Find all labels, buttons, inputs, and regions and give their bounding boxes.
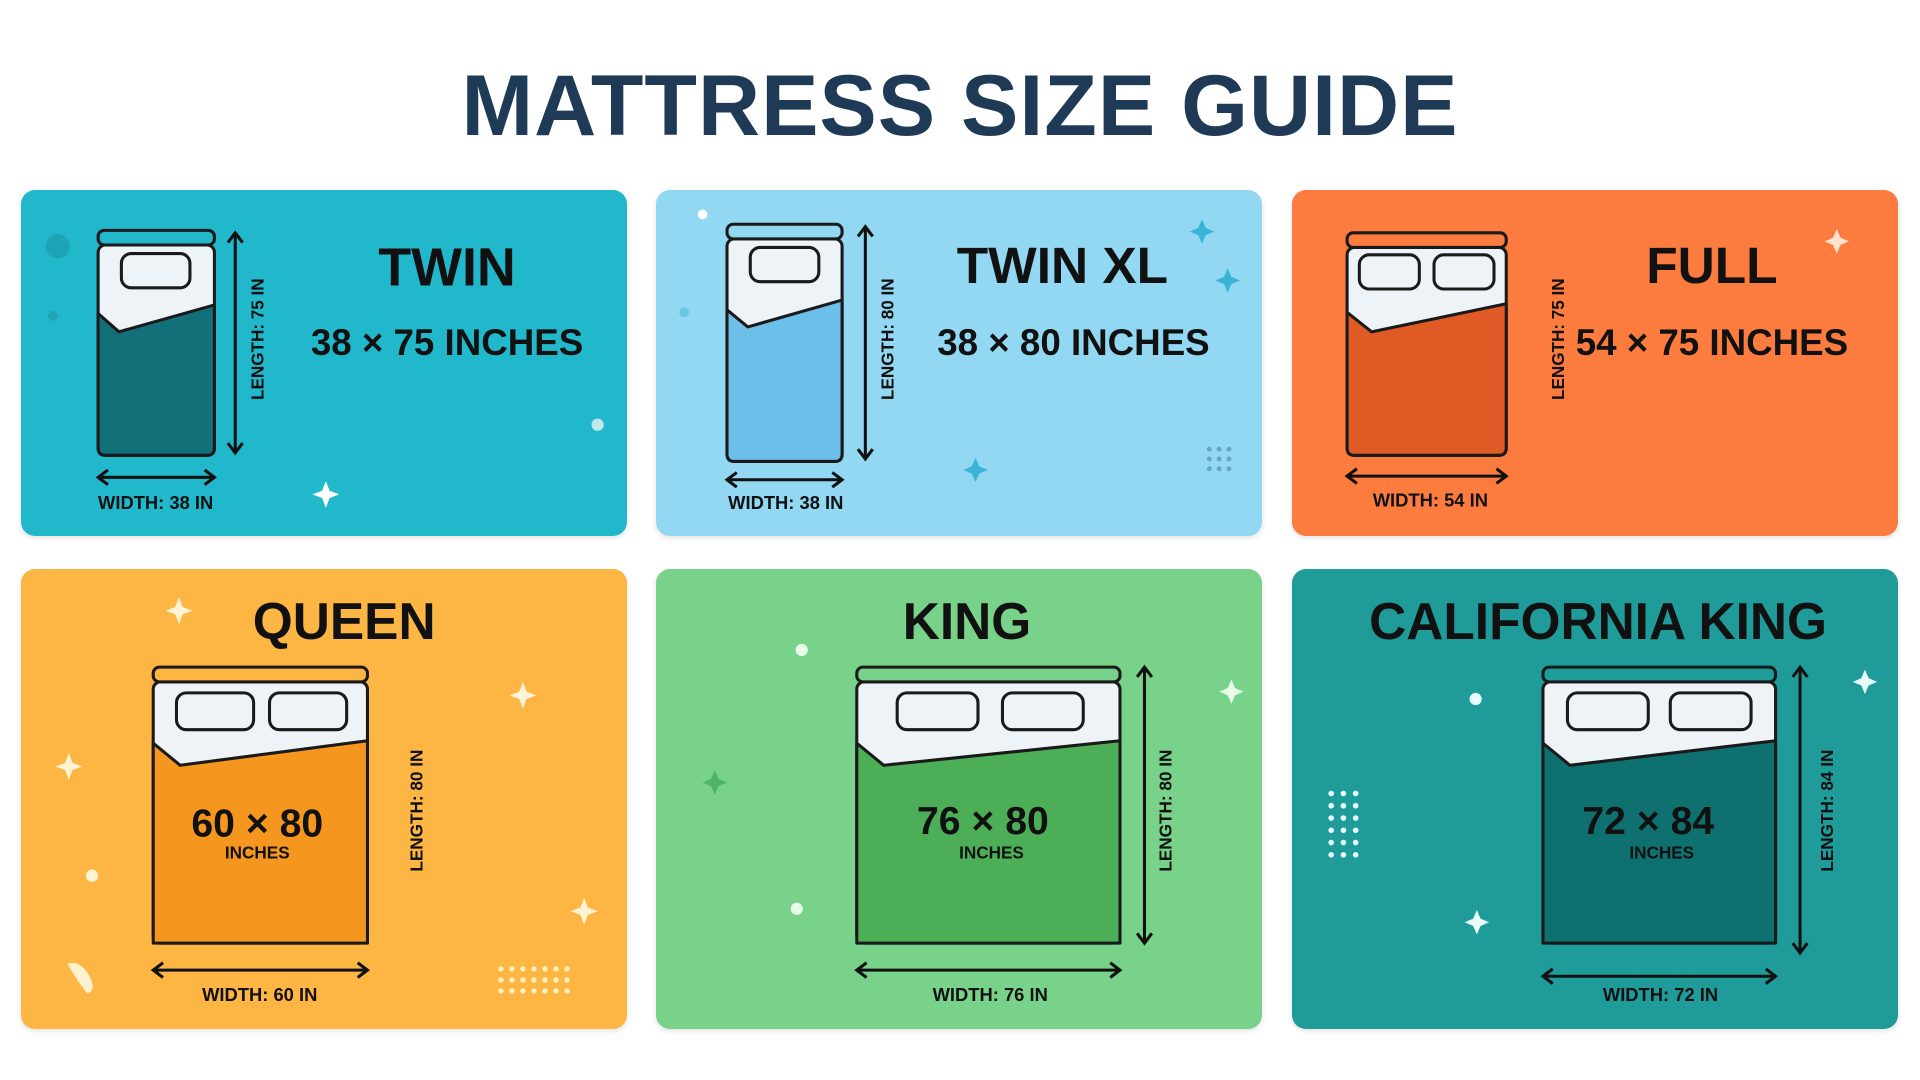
arrow: california king width <box>1543 969 1776 984</box>
label: king width: WIDTH: 76 IN <box>933 984 1048 1005</box>
label: queen width: WIDTH: 60 IN <box>202 984 317 1005</box>
icon: twin xl bed <box>727 224 842 461</box>
panel: king: INCHES <box>959 842 1024 862</box>
label: twin xl length: LENGTH: 80 IN <box>878 278 898 400</box>
text: full dimensions: 54 × 75 INCHES <box>1576 322 1848 363</box>
arrow: california king length <box>1793 667 1807 953</box>
icon: king bed <box>857 667 1120 943</box>
arrow: king length <box>1137 667 1152 943</box>
heading: california king: CALIFORNIA KING <box>1369 592 1827 650</box>
text: california king dimensions: 72 × 84 <box>1582 800 1714 843</box>
arrow: full width <box>1347 469 1506 483</box>
label: king length: LENGTH: 80 IN <box>1155 750 1175 872</box>
label: full length: LENGTH: 75 IN <box>1549 278 1568 400</box>
panel: california king <box>1292 569 1898 1029</box>
icon: twin bed <box>98 230 214 455</box>
panel: twin <box>21 190 627 536</box>
panel: california king: INCHES <box>1629 842 1694 862</box>
icon: california king bed <box>1543 667 1776 943</box>
heading: queen: QUEEN <box>253 592 436 650</box>
panel: king <box>656 569 1262 1029</box>
label: california king length: LENGTH: 84 IN <box>1817 750 1837 872</box>
panel: full <box>1292 190 1898 536</box>
title: MATTRESS SIZE GUIDE <box>462 58 1458 154</box>
text: queen dimensions: 60 × 80 <box>191 802 323 845</box>
text: twin dimensions: 38 × 75 INCHES <box>311 322 583 363</box>
text: king dimensions: 76 × 80 <box>917 800 1049 843</box>
arrow: twin xl length <box>858 227 873 459</box>
icon: queen bed <box>153 667 367 943</box>
label: queen length: LENGTH: 80 IN <box>407 750 427 872</box>
heading: full: FULL <box>1646 236 1778 294</box>
label: full width: WIDTH: 54 IN <box>1373 490 1488 511</box>
label: twin length: LENGTH: 75 IN <box>248 278 267 400</box>
text: twin xl dimensions: 38 × 80 INCHES <box>937 322 1210 363</box>
label: twin width: WIDTH: 38 IN <box>98 492 213 513</box>
heading: twin xl: TWIN XL <box>957 236 1168 294</box>
arrow: twin xl width <box>727 472 842 487</box>
panel: queen <box>21 569 627 1029</box>
arrow: twin width <box>98 470 214 485</box>
label: california king width: WIDTH: 72 IN <box>1603 984 1718 1005</box>
panel: queen: INCHES <box>225 842 290 862</box>
arrow: twin length <box>228 233 243 453</box>
arrow: king width <box>857 963 1120 977</box>
panel: twin xl <box>656 190 1262 536</box>
icon: full bed <box>1347 233 1506 455</box>
label: twin xl width: WIDTH: 38 IN <box>728 492 843 513</box>
heading: twin: TWIN <box>378 237 516 297</box>
heading: king: KING <box>903 592 1031 650</box>
arrow: queen width <box>153 963 367 977</box>
